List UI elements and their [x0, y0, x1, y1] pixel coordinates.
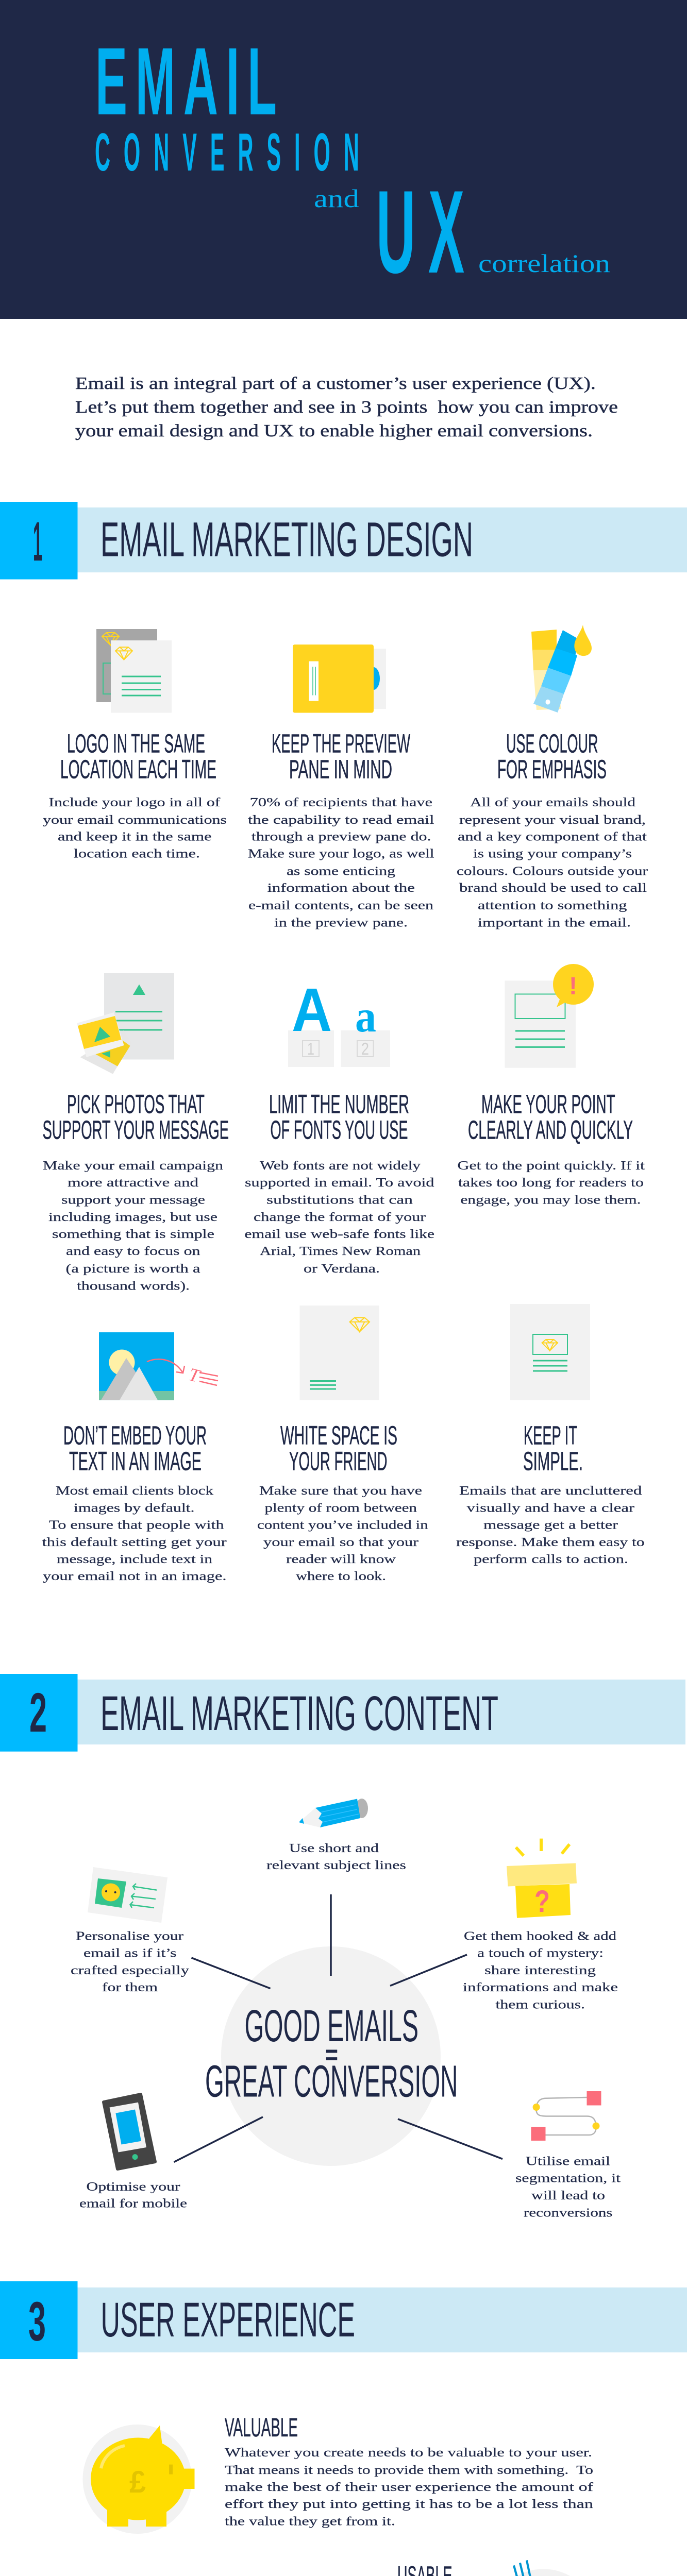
heading: OF FONTS YOU USE: [270, 1115, 408, 1144]
hub circle with title: =: [325, 2039, 338, 2071]
body text: substitutions that can: [266, 1193, 413, 1207]
body text: where to look.: [296, 1569, 386, 1583]
heading: PANE IN MIND: [289, 754, 392, 784]
icon: image with text leaving: [99, 1332, 218, 1400]
intro text: Let’s put them together and see in 3 points how you can improve: [75, 398, 618, 417]
section banner 3: user experience: USER EXPERIENCE: [101, 2293, 355, 2347]
text: segmentation: will lead to: [531, 2189, 605, 2202]
body text: To ensure that people with: [49, 1518, 224, 1532]
body text: important in the email.: [478, 916, 631, 929]
icon: simple email: [510, 1304, 590, 1400]
body text: supported in email. To avoid: [245, 1176, 434, 1190]
text: segmentation: Utilise email: [526, 2154, 610, 2168]
text: personalise: email as if it’s: [83, 1946, 177, 1960]
body text: [458, 1159, 645, 1207]
icon: piggy bank: [82, 2425, 195, 2534]
icon: mystery box: ?: [534, 1884, 550, 1919]
body text: Make sure your logo, as well: [248, 847, 434, 861]
heading: [272, 728, 410, 784]
section banner 3: user experience: 3: [28, 2290, 46, 2352]
title: EMAIL CONVERSION and UX correlation: [95, 28, 610, 298]
body text: takes too long for readers to: [458, 1176, 644, 1190]
heading: [269, 1089, 409, 1144]
panel: use colour for emphasis: [457, 625, 648, 929]
text: get them hooked: them curious.: [496, 1997, 585, 2011]
heading: KEEP IT: [524, 1421, 577, 1450]
body text: [457, 795, 648, 929]
icon: email with alert bubble: !: [569, 973, 577, 1000]
spoke lines: [174, 1894, 502, 2162]
body text: something that is simple: [52, 1227, 214, 1241]
icon: email with photos: [77, 973, 174, 1074]
text: subject lines: [266, 1841, 406, 1872]
panel: pick photos: [42, 973, 229, 1293]
text: get them hooked: informations and make: [463, 1980, 618, 1994]
body text: more attractive and: [68, 1176, 198, 1190]
body text: perform calls to action.: [474, 1552, 628, 1566]
heading: SIMPLE.: [523, 1447, 583, 1476]
heading: VALUABLE: [225, 2413, 298, 2442]
body text: [225, 2446, 594, 2529]
body text: information about the: [267, 881, 415, 895]
body text: is using your company’s: [473, 847, 632, 861]
body text: Web fonts are not widely: [260, 1159, 421, 1173]
intro text: Email is an integral part of a customer’s user experience (UX).: [75, 374, 596, 393]
icon: colour swatches: [531, 625, 592, 713]
icon: pencil: [299, 1799, 368, 1827]
body text: the value they get from it.: [225, 2514, 395, 2529]
heading: [523, 1421, 583, 1476]
heading: USE COLOUR: [506, 728, 598, 758]
section banner 3: user experience: [0, 2281, 687, 2359]
body text: response. Make them easy to: [456, 1535, 645, 1549]
section banner 1: email marketing design: 1: [33, 510, 42, 572]
heading: [42, 1089, 229, 1144]
hub circle with title: GOOD EMAILS: [244, 2001, 418, 2051]
body text: [244, 1159, 434, 1276]
body text: message get a better: [483, 1518, 618, 1532]
panel: logo in the same location: [43, 629, 227, 861]
body text: or Verdana.: [304, 1262, 380, 1276]
icon: font podium: 2: [361, 1039, 369, 1058]
body text: represent your visual brand,: [459, 813, 646, 827]
heading: LIMIT THE NUMBER: [269, 1089, 409, 1119]
text: optimise: [79, 2180, 187, 2211]
text: subject lines: relevant subject lines: [266, 1858, 406, 1872]
title: EMAIL CONVERSION and UX correlation: correlation: [478, 249, 610, 278]
body text: attention to something: [478, 899, 627, 912]
heading: [497, 728, 607, 784]
heading: WHITE SPACE IS: [280, 1421, 397, 1450]
panel: usable: [96, 2560, 598, 2576]
text: personalise: crafted especially: [71, 1963, 190, 1977]
text: personalise: [71, 1929, 190, 1994]
intro text: your email design and UX to enable higher email conversions.: [75, 421, 593, 440]
hub circle with title: [205, 1946, 458, 2166]
body text: your email so that your: [263, 1535, 418, 1549]
body text: Include your logo in all of: [48, 795, 221, 809]
heading: [468, 1089, 633, 1144]
heading: [63, 1421, 207, 1476]
panel: valuable: [82, 2413, 594, 2534]
text: get them hooked: Get them hooked & add: [464, 1929, 616, 1943]
body text: Get to the point quickly. If it: [458, 1159, 645, 1173]
title: EMAIL CONVERSION and UX correlation: EMAIL: [95, 28, 277, 135]
body text: [257, 1484, 428, 1583]
icon: email logo pages: [96, 629, 172, 713]
body text: through a preview pane do.: [252, 829, 431, 844]
text: personalise: Personalise your: [76, 1929, 183, 1943]
body text: Most email clients block: [56, 1484, 214, 1498]
body text: this default setting get your: [42, 1535, 227, 1549]
icon: fork and knife: [489, 2560, 598, 2576]
icon: font podium: a: [355, 992, 376, 1042]
text: optimise: Optimise your: [87, 2180, 180, 2194]
title: EMAIL CONVERSION and UX correlation: CONVERSION: [95, 122, 359, 182]
icon: font podium: [288, 976, 390, 1067]
body text: Arial, Times New Roman: [260, 1244, 421, 1258]
body text: plenty of room between: [265, 1501, 417, 1515]
body text: email use web-safe fonts like: [244, 1227, 434, 1241]
heading: [280, 1421, 397, 1476]
body text: and a key component of that: [458, 829, 647, 844]
heading: KEEP THE PREVIEW: [272, 728, 410, 758]
icon: mystery box: [507, 1839, 577, 1919]
panel: keep it simple: [456, 1304, 645, 1566]
body text: [42, 1484, 227, 1583]
body text: the capability to read email: [248, 813, 434, 827]
body text: change the format of your: [254, 1210, 426, 1224]
body text: as some enticing: [287, 865, 395, 878]
icon: email with alert bubble: [505, 964, 594, 1068]
text: subject lines: Use short and: [289, 1841, 379, 1855]
body text: (a picture is worth a: [66, 1262, 200, 1276]
section banner 2: email marketing content: 2: [29, 1681, 47, 1743]
body text: reader will know: [286, 1552, 396, 1566]
panel: don't embed text: [42, 1332, 227, 1583]
icon: font podium: A: [292, 976, 332, 1044]
icon: piggy bank: £: [129, 2465, 146, 2499]
body text: brand should be used to call: [459, 881, 647, 895]
panel: make your point: [458, 964, 645, 1207]
body text: your email not in an image.: [43, 1569, 227, 1583]
panel: keep the preview pane in mind: [248, 645, 434, 929]
section banner 1: email marketing design: [0, 502, 687, 579]
text: segmentation: segmentation, it: [515, 2172, 621, 2185]
body text: location each time.: [74, 847, 200, 861]
icon: personalised card: [88, 1867, 167, 1923]
body text: [248, 795, 434, 929]
icon: mobile phone: [104, 2094, 155, 2169]
body text: colours. Colours outside your: [457, 865, 648, 878]
title: EMAIL CONVERSION and UX correlation: and: [314, 184, 359, 213]
body text: That means it needs to provide them with something. To: [225, 2463, 593, 2477]
body text: Emails that are uncluttered: [459, 1484, 642, 1498]
heading: TEXT IN AN IMAGE: [69, 1447, 202, 1476]
hub circle with title: GREAT CONVERSION: [205, 2057, 458, 2106]
text: get them hooked: a touch of mystery:: [477, 1946, 604, 1960]
section banner 2: email marketing content: [0, 1674, 685, 1752]
body text: visually and have a clear: [467, 1501, 634, 1515]
body text: message, include text in: [57, 1552, 212, 1566]
heading: SUPPORT YOUR MESSAGE: [42, 1115, 229, 1144]
icon: font podium: 1: [307, 1039, 314, 1058]
body text: and easy to focus on: [66, 1244, 200, 1258]
text: segmentation: reconversions: [524, 2206, 612, 2219]
body text: [43, 1159, 223, 1293]
body text: thousand words).: [77, 1279, 190, 1293]
body text: 70% of recipients that have: [250, 795, 432, 809]
body text: content you’ve included in: [257, 1518, 428, 1532]
body text: in the preview pane.: [274, 916, 408, 929]
text: segmentation: [515, 2154, 621, 2219]
body text: and keep it in the same: [58, 829, 212, 844]
body text: make the best of their user experience the amount of: [225, 2480, 594, 2494]
body text: support your message: [61, 1193, 205, 1207]
icon: preview pane: [293, 645, 386, 713]
heading: PICK PHOTOS THAT: [67, 1089, 205, 1119]
header panel: [0, 0, 687, 319]
body text: images by default.: [74, 1501, 195, 1515]
panel: white space: [257, 1306, 428, 1583]
heading: LOCATION EACH TIME: [60, 754, 216, 784]
text: get them hooked: share interesting: [484, 1963, 596, 1977]
title: EMAIL CONVERSION and UX correlation: UX: [376, 166, 464, 298]
body text: Whatever you create needs to be valuable to your user.: [225, 2446, 592, 2460]
diagram: good emails hub: [71, 1799, 621, 2219]
icon: email with white space: [300, 1306, 379, 1400]
icon: segmentation path: [531, 2091, 601, 2141]
icon: image with text leaving: T: [187, 1364, 203, 1387]
body text: Make sure that you have: [259, 1484, 422, 1498]
text: optimise: email for mobile: [79, 2197, 187, 2211]
body text: All of your emails should: [470, 795, 635, 809]
body text: your email communications: [43, 813, 227, 827]
body text: engage, you may lose them.: [461, 1193, 641, 1207]
heading: LOGO IN THE SAME: [67, 728, 205, 758]
panel: limit the number of fonts: [244, 976, 434, 1276]
body text: [456, 1484, 645, 1566]
heading: YOUR FRIEND: [289, 1447, 388, 1476]
heading: [60, 728, 216, 784]
body text: e-mail contents, can be seen: [248, 899, 433, 912]
body text: effort they put into getting it has to be a lot less than: [225, 2497, 593, 2511]
body text: including images, but use: [48, 1210, 217, 1224]
text: personalise: for them: [102, 1980, 158, 1994]
text: get them hooked: [463, 1929, 618, 2011]
heading: DON’T EMBED YOUR: [63, 1421, 207, 1450]
body text: [43, 795, 227, 861]
body text: Make your email campaign: [43, 1159, 223, 1173]
intro text: [75, 374, 618, 440]
